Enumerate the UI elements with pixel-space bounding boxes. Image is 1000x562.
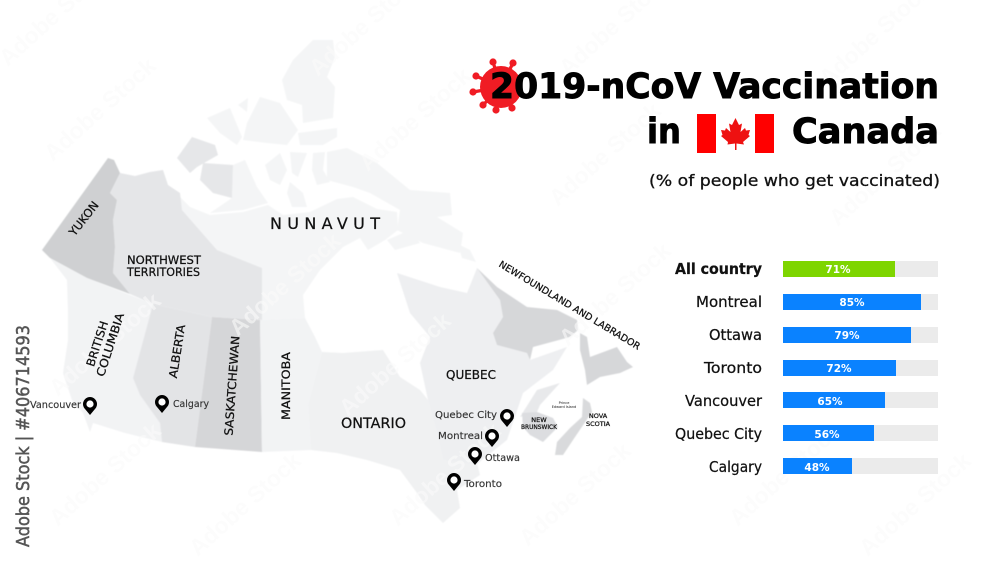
pin: Quebec City: Quebec City — [435, 410, 497, 421]
title: in — [647, 112, 681, 152]
watermark pattern: Adobe Stock — [514, 437, 636, 551]
region: Quebec — [397, 268, 567, 464]
title: 2019-nCoV Vaccination — [490, 67, 939, 107]
label: Saskatchewan: SASKATCHEWAN — [222, 335, 242, 436]
row: Quebec City: 56% — [814, 429, 840, 441]
region: Yukon — [42, 158, 130, 294]
label: Nova Scotia: NOVA — [589, 412, 608, 420]
row: Vancouver: Vancouver — [685, 392, 763, 410]
row: Montreal: Montreal — [696, 293, 762, 311]
row: Toronto — [703, 359, 938, 377]
row: Toronto: Toronto — [703, 359, 762, 377]
label: New Brunswick: BRUNSWICK — [521, 423, 558, 431]
pin: Montreal — [438, 429, 499, 447]
label: Northwest Territories: TERRITORIES — [126, 265, 200, 279]
row: Quebec City: Quebec City — [675, 425, 762, 443]
pin: Toronto — [447, 473, 502, 491]
pin: Calgary: Calgary — [173, 399, 209, 410]
row: All country: 71% — [825, 264, 851, 276]
watermark pattern: Adobe Stock — [824, 117, 946, 231]
region: Northwest Territories — [110, 170, 262, 320]
label: Prince Edward Island: Prince — [559, 401, 569, 405]
title — [490, 67, 939, 152]
watermark pattern: Adobe Stock — [554, 237, 676, 351]
label: Prince Edward Island — [552, 401, 576, 409]
pin: Vancouver: Vancouver — [30, 400, 82, 411]
label: Nova Scotia: SCOTIA — [586, 420, 611, 428]
region: Alberta — [133, 304, 212, 447]
label: Nunavut: NUNAVUT — [270, 214, 380, 233]
label: Northwest Territories — [126, 253, 202, 279]
pin: Vancouver — [30, 397, 97, 415]
pin: Quebec City — [435, 409, 514, 427]
region: New Brunswick — [522, 412, 558, 442]
row: Ottawa: Ottawa — [709, 326, 762, 344]
icon: red virus — [469, 58, 522, 114]
subtitle: (% of people who get vaccinated) — [649, 171, 940, 190]
watermark pattern: Adobe Stock — [44, 417, 166, 531]
row: Montreal — [696, 293, 938, 311]
label: British Columbia: BRITISH — [83, 319, 111, 368]
stock id text: Adobe Stock | #406714593 — [13, 325, 34, 547]
row: Calgary: 48% — [804, 462, 830, 474]
region: Ontario — [308, 350, 480, 523]
watermark pattern: Adobe Stock — [544, 97, 666, 211]
icon: Canadian flag — [697, 114, 774, 153]
row: Montreal: 85% — [839, 297, 865, 309]
label: Manitoba: MANITOBA — [279, 352, 293, 420]
watermark pattern: Adobe Stock — [224, 227, 346, 341]
watermark pattern: Adobe Stock — [724, 417, 846, 531]
watermark pattern: Adobe Stock — [354, 62, 476, 176]
region: Nunavut — [180, 40, 476, 320]
label: British Columbia — [83, 311, 127, 378]
label: Northwest Territories: NORTHWEST — [127, 253, 202, 267]
label: Ontario: ONTARIO — [341, 416, 406, 432]
watermark pattern: Adobe Stock — [184, 447, 306, 561]
label: New Brunswick — [521, 416, 558, 431]
row: All country: All country — [675, 260, 762, 278]
watermark pattern: Adobe Stock — [44, 287, 166, 401]
pin: Calgary — [155, 395, 209, 413]
row: Quebec City — [675, 425, 938, 443]
region: Nova Scotia — [555, 398, 592, 455]
label: Newfoundland and Labrador: NEWFOUNDLAND AND LABRADOR — [497, 259, 642, 353]
label: Yukon: YUKON — [65, 198, 102, 239]
pin: Ottawa — [468, 447, 520, 465]
row: Ottawa — [709, 326, 938, 344]
title: Canada — [792, 112, 939, 152]
label: New Brunswick: NEW — [531, 416, 547, 424]
watermark pattern: Adobe Stock — [854, 447, 976, 561]
row: All country — [675, 260, 938, 278]
region: British Columbia — [50, 258, 162, 442]
pin: Ottawa: Ottawa — [485, 453, 520, 464]
watermark pattern: Adobe Stock — [39, 52, 161, 166]
label: Quebec: QUEBEC — [446, 368, 496, 382]
label: Prince Edward Island: Edward Island — [552, 405, 576, 409]
region: Saskatchewan — [195, 317, 262, 452]
region: Manitoba — [260, 318, 322, 452]
province labels — [65, 198, 642, 436]
label: British Columbia: COLUMBIA — [93, 311, 127, 378]
row: Ottawa: 79% — [834, 330, 860, 342]
row: Vancouver — [685, 392, 938, 410]
row: Toronto: 72% — [826, 363, 852, 375]
pin: Montreal: Montreal — [438, 431, 483, 442]
row: Calgary — [709, 458, 938, 476]
region: Newfoundland and Labrador — [477, 268, 633, 385]
row: Vancouver: 65% — [817, 396, 843, 408]
watermark pattern: Adobe Stock — [334, 307, 456, 421]
label: Alberta: ALBERTA — [166, 323, 188, 379]
row: Calgary: Calgary — [709, 458, 762, 476]
region: Gaspe peninsula — [520, 383, 560, 417]
label: Nova Scotia — [586, 412, 611, 428]
region: Arctic islands of the Northwest Territories — [177, 137, 233, 198]
watermark pattern: Adobe Stock — [384, 417, 506, 531]
pin: Toronto: Toronto — [463, 479, 502, 490]
map of Canada — [42, 40, 633, 523]
bar chart — [675, 260, 938, 476]
